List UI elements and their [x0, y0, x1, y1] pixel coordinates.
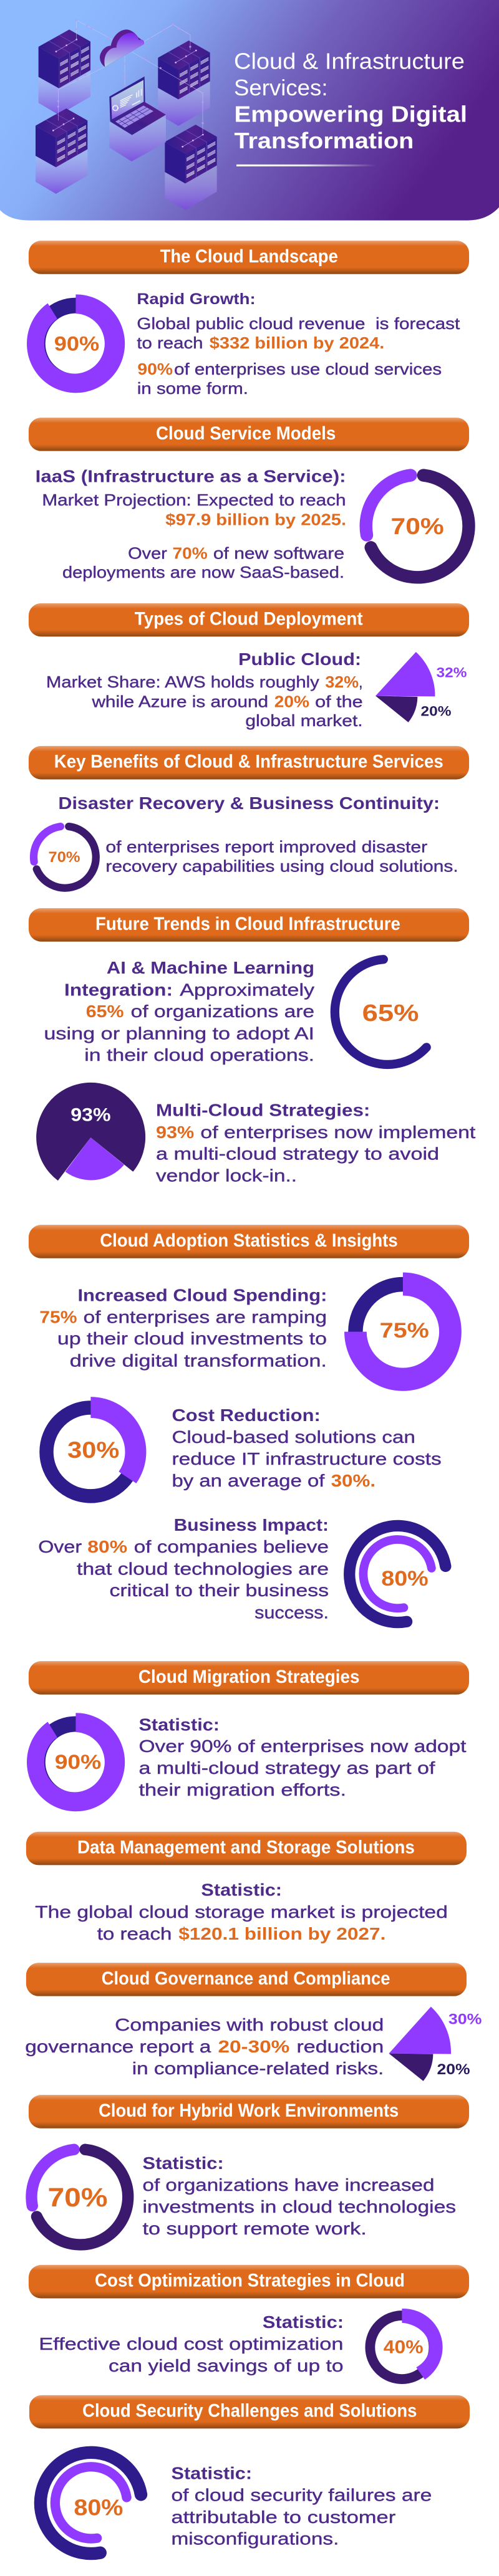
donut chart 30%: 30%: [67, 1437, 119, 1463]
text: rapid growth: $332 billion by 2024.: [210, 334, 384, 352]
banner: [29, 241, 469, 274]
text: multi-cloud: Multi-Cloud Strategies:: [156, 1101, 370, 1120]
text: migration statistic: Over 90% of enterprises now adopt: [138, 1737, 467, 1756]
text: public cloud: global market.: [245, 712, 363, 730]
text: public cloud: [46, 650, 363, 730]
icon: cloud: [100, 29, 144, 67]
double ring chart 80%: [349, 1526, 445, 1622]
text: storage statistic: The global cloud storage market is projected: [35, 1903, 448, 1922]
text: business impact: critical to their business: [110, 1581, 329, 1601]
text: AI integration: [44, 959, 315, 1065]
banner: [26, 1832, 467, 1865]
text: migration statistic: Statistic:: [138, 1715, 220, 1735]
header panel: [0, 0, 499, 221]
text: cost reduction: by an average of: [172, 1472, 325, 1490]
ring chart 70%: 70%: [391, 514, 444, 540]
text: cost statistic: [39, 2313, 344, 2375]
donut chart 90%: 90%: [54, 333, 99, 355]
section: The Cloud Landscape: [27, 241, 469, 398]
text: rapid growth: Rapid Growth:: [137, 290, 256, 308]
text: business impact: that cloud technologies are: [77, 1559, 329, 1579]
pie chart 93%: [36, 1083, 145, 1180]
text: public cloud: 20%: [274, 692, 309, 711]
pie chart: governance: 20%: [437, 2062, 470, 2078]
text: AI integration: Approximately: [180, 980, 315, 1000]
banner: [29, 2395, 470, 2428]
text: IaaS: IaaS (Infrastructure as a Service):: [36, 467, 346, 486]
section: Cost Optimization: [29, 2265, 469, 2380]
ring chart 70% small: [34, 826, 96, 888]
title: Empowering Digital: [235, 102, 467, 127]
text: storage statistic: to reach: [97, 1925, 172, 1944]
text: public cloud: Public Cloud:: [238, 650, 361, 669]
section: Key Benefits: [29, 746, 469, 888]
text: migration statistic: their migration efforts.: [138, 1781, 346, 1799]
text: business impact: success.: [254, 1603, 329, 1622]
text: rapid growth: Global public cloud revenue is forecast: [137, 315, 460, 333]
icon: server rack 2: [158, 41, 210, 126]
donut chart 90%: [27, 1713, 125, 1811]
double ring chart 80%: 80%: [381, 1566, 429, 1591]
double ring chart 80%: [41, 2453, 141, 2554]
banner: Types of Cloud Deployment: [135, 608, 363, 629]
section: Cloud Migration: [27, 1661, 469, 1811]
text: public cloud: while Azure is around: [91, 692, 268, 711]
banner: [29, 603, 469, 636]
banner: Cloud Governance and Compliance: [102, 1968, 390, 1988]
text: migration statistic: a multi-cloud strategy as part of: [138, 1759, 435, 1778]
banner: [29, 2265, 469, 2299]
ring chart 70%: [31, 2150, 128, 2244]
text: increased spending: Increased Cloud Spending:: [77, 1286, 327, 1305]
text: security statistic: [171, 2464, 432, 2549]
text: rapid growth: in some form.: [137, 380, 248, 398]
donut chart 30%: [46, 1397, 146, 1496]
text: business impact: 80%: [87, 1538, 127, 1557]
donut chart 75%: [344, 1273, 462, 1391]
text: multi-cloud: [156, 1101, 476, 1185]
text: business impact: of companies believe: [134, 1538, 329, 1557]
banner: [29, 1661, 469, 1695]
text: migration statistic: [138, 1715, 467, 1799]
text: security statistic: Statistic:: [171, 2464, 252, 2483]
text: hybrid statistic: to support remote work.: [143, 2219, 367, 2238]
icon: server rack 1: [39, 29, 90, 115]
section: Cloud Security: [29, 2395, 470, 2554]
text: disaster recovery: of enterprises report improved disaster: [105, 838, 427, 856]
text: AI integration: AI & Machine Learning: [107, 959, 314, 978]
pie chart: governance: [389, 2007, 482, 2081]
text: business impact: Business Impact:: [174, 1516, 329, 1535]
text: cost reduction: Cost Reduction:: [172, 1406, 321, 1425]
text: public cloud: ,: [359, 673, 363, 691]
text: increased spending: of enterprises are ramping: [84, 1308, 327, 1327]
text: IaaS: Market Projection: Expected to reach: [42, 491, 346, 509]
text: multi-cloud: of enterprises now implement: [200, 1123, 476, 1142]
text: rapid growth: 90%: [137, 360, 173, 378]
text: multi-cloud: 93%: [156, 1123, 194, 1142]
text: multi-cloud: vendor lock-in..: [156, 1166, 297, 1185]
pie chart 93%: 93%: [70, 1104, 111, 1125]
title: Services:: [234, 75, 328, 101]
text: governance: reduction: [297, 2037, 384, 2056]
text: IaaS: $97.9 billion by 2025.: [165, 510, 346, 529]
text: IaaS: of new software: [213, 544, 344, 562]
donut chart 40%: [370, 2309, 443, 2380]
section: Cloud Governance: [25, 1963, 482, 2081]
text: public cloud: of the: [315, 692, 363, 711]
text: IaaS: [36, 467, 346, 582]
banner: Cloud Migration Strategies: [138, 1666, 360, 1687]
icon: server rack 4: [165, 125, 217, 210]
donut chart 40%: 40%: [384, 2336, 424, 2357]
section: Future Trends: [29, 908, 476, 1185]
ring chart 65%: [335, 959, 427, 1065]
text: governance: 20-30%: [218, 2037, 289, 2056]
banner: [29, 418, 469, 451]
banner: [29, 908, 469, 942]
title: Cloud & Infrastructure: [234, 49, 465, 74]
title: [234, 49, 467, 153]
icon: server rack 3: [36, 108, 87, 194]
banner: Cloud for Hybrid Work Environments: [99, 2100, 399, 2121]
banner: Data Management and Storage Solutions: [77, 1837, 415, 1857]
title: Transformation: [235, 128, 414, 153]
illustration: cloud network: [36, 19, 217, 210]
title underline: [236, 165, 377, 166]
section: Types of Cloud Deployment: [29, 603, 469, 730]
heading: disaster recovery: Disaster Recovery & Business Continuity:: [58, 794, 440, 813]
text: hybrid statistic: [143, 2154, 456, 2238]
text: cost statistic: Effective cloud cost optimization: [39, 2335, 344, 2354]
ring chart 70%: [366, 476, 468, 577]
text: business impact: [38, 1516, 329, 1622]
banner: Cost Optimization Strategies in Cloud: [95, 2270, 405, 2291]
double ring chart 80%: 80%: [74, 2496, 123, 2521]
icon: laptop: [109, 77, 166, 161]
text: public cloud: 32%: [325, 673, 359, 691]
text: hybrid statistic: of organizations have increased: [143, 2176, 434, 2195]
donut chart 90%: 90%: [55, 1751, 101, 1773]
donut chart 75%: 75%: [380, 1318, 429, 1342]
ring chart 70% small: 70%: [49, 850, 80, 866]
text: security statistic: of cloud security failures are: [171, 2486, 432, 2505]
banner: Future Trends in Cloud Infrastructure: [95, 913, 400, 934]
pie chart: governance: 30%: [448, 2011, 482, 2028]
text: multi-cloud: a multi-cloud strategy to avoid: [156, 1145, 439, 1164]
text: security statistic: misconfigurations.: [171, 2529, 339, 2549]
donut chart 90%: [27, 294, 125, 393]
text: hybrid statistic: Statistic:: [143, 2154, 224, 2173]
pie chart: market share: 20%: [420, 704, 451, 719]
text: cost reduction: 30%.: [331, 1472, 375, 1490]
section: Cloud Adoption: [29, 1225, 469, 1622]
text: IaaS: deployments are now SaaS-based.: [62, 563, 344, 582]
text: cost statistic: Statistic:: [263, 2313, 344, 2332]
text: governance: governance report a: [25, 2037, 211, 2056]
section: Hybrid Work: [29, 2095, 469, 2244]
section: Cloud Service Models: [29, 418, 469, 582]
banner: Cloud Security Challenges and Solutions: [82, 2400, 417, 2421]
banner: The Cloud Landscape: [160, 246, 338, 267]
text: disaster recovery: recovery capabilities using cloud solutions.: [105, 857, 458, 875]
banner: Cloud Adoption Statistics & Insights: [100, 1230, 398, 1251]
text: governance: Companies with robust cloud: [115, 2016, 384, 2035]
text: security statistic: attributable to customer: [171, 2508, 395, 2527]
text: AI integration: using or planning to adopt AI: [44, 1024, 314, 1043]
text: increased spending: 75%: [39, 1308, 77, 1327]
banner: [29, 1225, 469, 1258]
text: rapid growth: [137, 290, 460, 398]
text: governance: in compliance-related risks.: [132, 2059, 384, 2079]
text: business impact: Over: [38, 1538, 82, 1557]
text: AI integration: in their cloud operations.: [84, 1046, 314, 1065]
text: cost statistic: can yield savings of up to: [109, 2357, 344, 2375]
banner: Cloud Service Models: [156, 423, 336, 443]
banner: [26, 1963, 467, 1996]
text: rapid growth: to reach: [137, 334, 203, 352]
banner: [29, 2095, 469, 2128]
pie chart: market share: [375, 652, 467, 722]
text: AI integration: Integration:: [64, 980, 173, 1000]
text: IaaS: 70%: [173, 544, 208, 562]
ring chart 65%: 65%: [362, 999, 419, 1026]
text: AI integration: 65%: [86, 1002, 124, 1022]
text: public cloud: Market Share: AWS holds roughly: [46, 673, 319, 691]
ring chart 70%: 70%: [48, 2183, 107, 2212]
pie chart: market share: 32%: [436, 665, 467, 681]
text: cost reduction: Cloud-based solutions can: [172, 1428, 415, 1447]
text: AI integration: of organizations are: [131, 1002, 314, 1022]
text: storage statistic: [35, 1880, 448, 1944]
text: storage statistic: Statistic:: [201, 1880, 282, 1900]
text: hybrid statistic: investments in cloud technologies: [143, 2198, 456, 2217]
text: governance: [25, 2016, 384, 2079]
text: storage statistic: $120.1 billion by 2027.: [178, 1925, 385, 1944]
text: increased spending: drive digital transformation.: [70, 1351, 327, 1371]
text: IaaS: Over: [128, 544, 167, 562]
text: increased spending: [39, 1286, 327, 1371]
text: disaster recovery: [105, 838, 458, 875]
banner: [29, 746, 469, 779]
text: cost reduction: reduce IT infrastructure costs: [172, 1450, 442, 1469]
network lines and nodes: [57, 19, 204, 133]
text: rapid growth: of enterprises use cloud services: [174, 360, 442, 378]
text: increased spending: up their cloud investments to: [57, 1329, 327, 1349]
section: Data Management: [26, 1832, 467, 1944]
text: cost reduction: [172, 1406, 442, 1490]
